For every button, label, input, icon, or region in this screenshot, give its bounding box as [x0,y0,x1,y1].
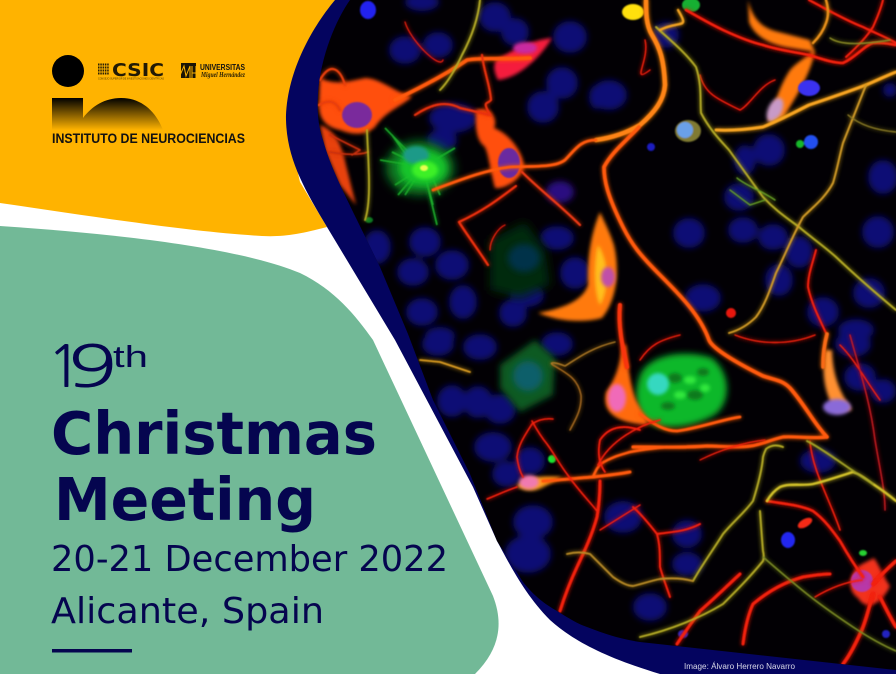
title: edition number: 1 [47,338,82,396]
accent underline [52,649,132,652]
bright dots and small cells [360,0,890,638]
large green cell [636,354,727,427]
logo: in mark with gradient [52,98,163,130]
dim green glial cells [490,222,555,412]
logo: Universitas Miguel Hernández: Miguel Hernández [200,71,245,79]
thin red neurites [405,0,896,664]
location: Alicante, Spain [51,591,324,632]
date: 20-21 December 2022 [51,539,448,580]
logo: CSIC: CSIC [112,61,164,81]
bright green astrocyte [380,128,455,225]
logo: institute dot [52,55,84,87]
title: Meeting: Meeting [54,465,316,534]
logo: Universitas Miguel Hernández: UNIVERSITAS [200,63,246,72]
logo: institute name: INSTITUTO DE NEUROCIENCIAS [52,131,245,146]
title: edition number: 9 [68,339,117,396]
title: edition number [47,338,148,396]
image credit: Image: Álvaro Herrero Navarro [684,662,796,671]
title: Christmas: Christmas [51,399,377,468]
orange cell bodies [319,0,890,605]
yellow-green neurites [365,0,896,651]
logo: CSIC [98,61,164,81]
logo: Universitas Miguel Hernández [178,63,246,81]
yellow header panel [0,0,340,236]
navy frame behind the photo [286,0,896,674]
neuron nuclei and bright somata [342,42,873,592]
dim blue nuclei [363,0,896,621]
microscopy photo of neurons [300,0,896,674]
title: edition number: th [113,339,148,374]
logo: CSIC: CONSEJO SUPERIOR DE INVESTIGACIONES CIENTÍFICAS [98,76,164,80]
thick orange neurites [319,0,896,481]
green title panel [0,226,499,674]
